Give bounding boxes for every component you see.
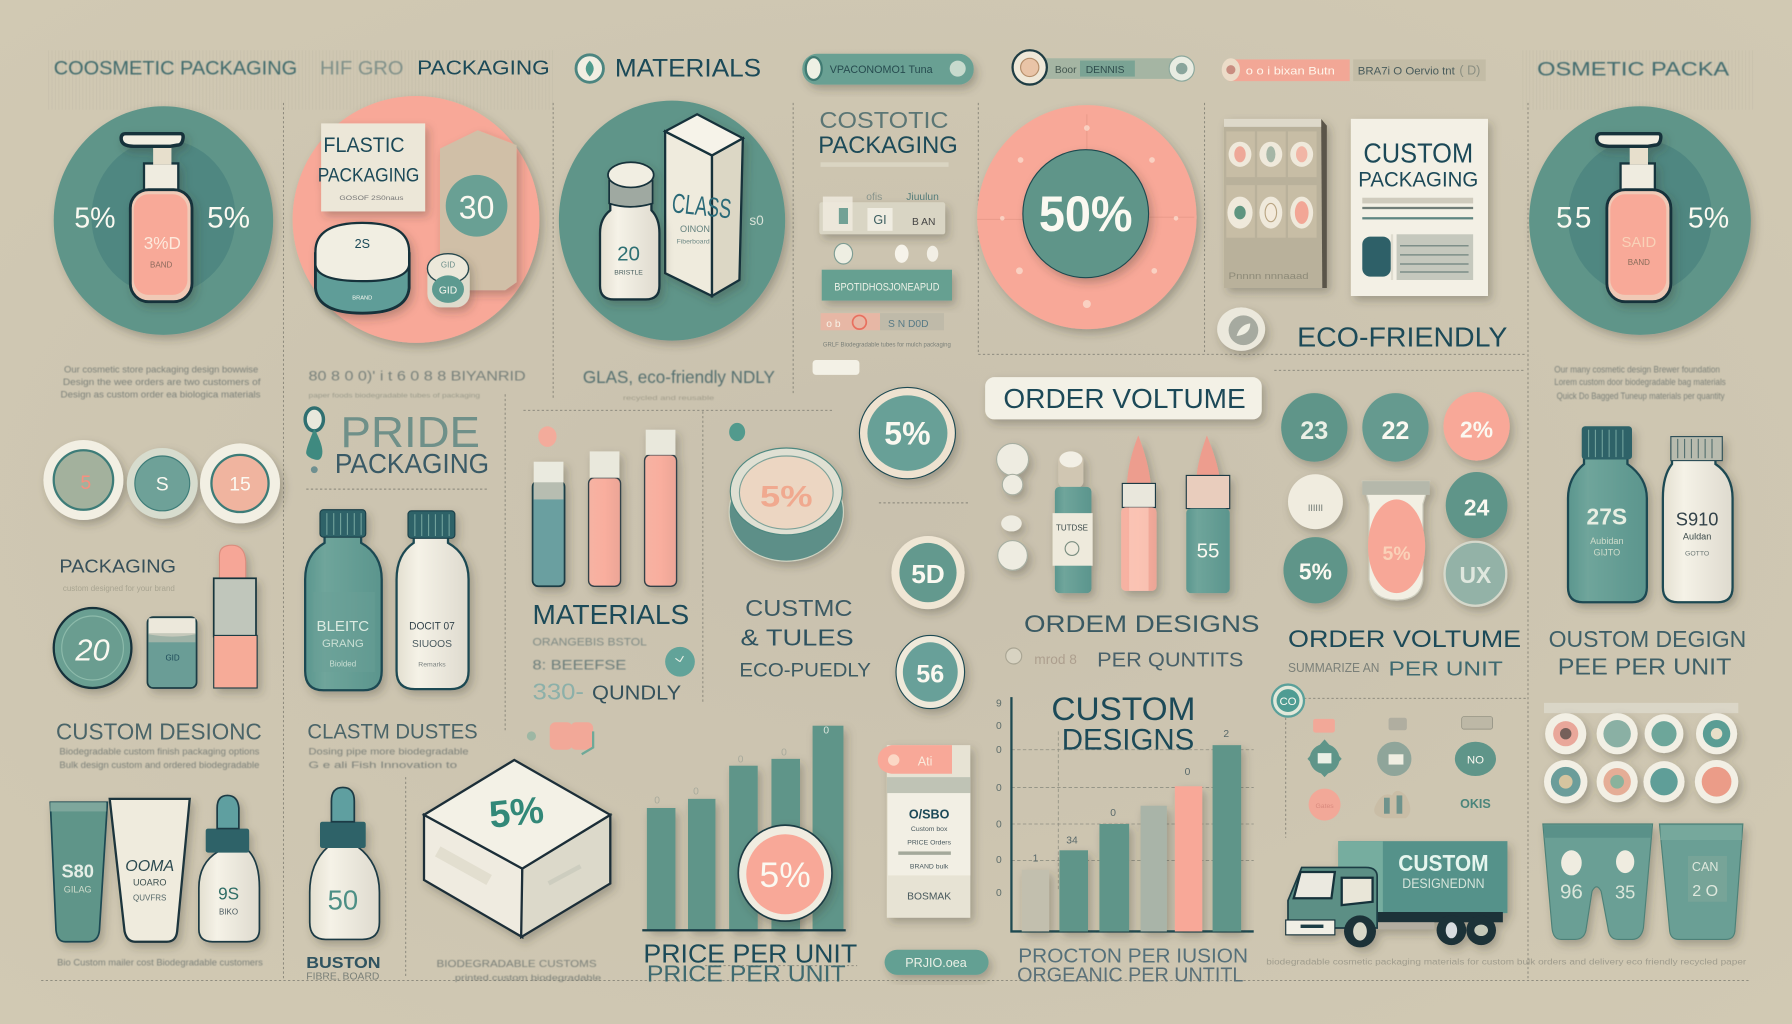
heading: costotic: COSTOTIC: [819, 107, 949, 133]
icon: teal tube: GILAG: [64, 885, 92, 895]
icon: cream tube: OOMA: [125, 858, 174, 875]
icon: large disc: 5%: [760, 480, 813, 513]
tag row: [821, 313, 944, 330]
icon: salmon dot: [538, 426, 557, 447]
icon: dropper bottle: 9S: [218, 883, 239, 903]
icon: white bottle: S910: [1676, 509, 1718, 530]
icon: white bottle: [397, 511, 469, 689]
header strip: [54, 50, 1729, 85]
icon: bottle: BRISTLE: [614, 269, 643, 276]
tube: teal with label: TUTDSE: [1056, 523, 1088, 532]
spec card: [819, 192, 945, 234]
axis labels: 0: [996, 855, 1002, 866]
icon: salmon tube: 5%: [1383, 543, 1411, 565]
icon: wide tube: CAN: [1692, 860, 1718, 874]
pill: ring label: Boor: [1055, 65, 1077, 76]
icon: pump bottle: [121, 134, 192, 302]
icon: delivery truck: [1286, 841, 1507, 947]
paper label: [318, 123, 425, 211]
label card: Custom box: [911, 826, 948, 833]
text: per quantities: mrod 8: [1034, 652, 1077, 667]
pill: salmon and tan label: BRA7i O Oervio tnt: [1358, 65, 1456, 77]
icon: box: OINON: [680, 224, 710, 234]
subtext: ORANGEBIS BSTOL: [533, 637, 647, 649]
heading: and rules: & TULES: [741, 625, 854, 651]
label card: PRICE Orders: [907, 840, 952, 847]
label card: BRAND bulk: [910, 864, 949, 871]
icon grid: NO: [1467, 754, 1484, 766]
teal button: BPOTIDHOSJONEAPUD: [834, 281, 939, 293]
badge: CO: [1279, 696, 1297, 708]
heading: cosmetic packaging: COOSMETIC PACKAGING: [54, 57, 297, 79]
bar value labels: 2: [1223, 729, 1229, 740]
salmon disc: [977, 105, 1197, 329]
pill: teal label: [802, 54, 974, 85]
axis labels: 0: [996, 745, 1002, 756]
panel: custom design bottles: [1549, 426, 1746, 679]
icon: teal bottle: GIJTO: [1594, 547, 1620, 557]
axis: [1011, 697, 1254, 931]
subtext: Biodegradable custom finish packaging options: [59, 746, 260, 756]
subtext: [533, 637, 647, 673]
paper label: GOSOF 2S0naus: [339, 195, 404, 202]
text: organic per unit: ORGEANIC PER UNTITL: [1017, 964, 1243, 987]
text: per quantities: PER QUNTITS: [1097, 648, 1243, 671]
axis labels: 0: [996, 721, 1002, 732]
pill: [885, 950, 989, 975]
label: custom: BUSTON: [306, 955, 381, 972]
heading: packaging: PACKAGING: [818, 132, 958, 159]
axis labels: [996, 698, 1002, 899]
icon: leaf badge: [576, 55, 603, 82]
badge: 23: [1281, 393, 1347, 462]
badge: pale: [1445, 542, 1506, 606]
icon: leaf seal: [1217, 307, 1265, 351]
teal badge: [1023, 150, 1149, 278]
icon: delivery truck: CUSTOM: [1398, 850, 1489, 876]
footer fine print: biodegradable cosmetic packaging materials for custom bulk orders and delivery eco friendly recycled paper: [1266, 958, 1747, 967]
small stat: s0: [749, 213, 764, 228]
icon: box: CLASS: [671, 187, 733, 224]
teal disc: [54, 106, 273, 335]
stat left: 55: [1556, 201, 1594, 234]
heading: custom design: OUSTOM DEGIGN: [1549, 626, 1746, 652]
axis labels: 0: [996, 819, 1002, 830]
caption: Lorem custom door biodegradable bag materials: [1554, 377, 1726, 387]
subtext: [309, 746, 469, 770]
badge values: [80, 472, 251, 495]
icon: dropper bottle: 50: [328, 885, 358, 916]
badge: 5%: 5%: [884, 416, 931, 452]
fine print: [437, 959, 602, 983]
panel: ring badges and lipstick: [43, 440, 280, 688]
fine print: BIODEGRADABLE CUSTOMS: [437, 959, 597, 970]
panel: custom design tubes: [50, 718, 263, 968]
subheading: price per unit: PRICE PER UNIT: [647, 961, 846, 987]
heading: packaging: PACKAGING: [335, 448, 489, 479]
panel: custom designs chart: [996, 691, 1254, 987]
badge values: 5: [80, 472, 91, 494]
icon: teal tube: [50, 802, 107, 942]
icon: white bottle: [1663, 437, 1733, 602]
icon: small jar: GID: [439, 286, 457, 297]
icon: teal tube: S80: [61, 861, 94, 882]
heading: materials: MATERIALS: [533, 599, 689, 630]
fine print: printed custom biodegradable: [455, 974, 602, 983]
bar value labels: [1033, 729, 1229, 865]
badge: 22: [1362, 393, 1429, 462]
badge values: S: [156, 473, 169, 495]
badge: 22: 22: [1381, 417, 1409, 445]
subtext: G e ali Fish Innovation to: [309, 760, 457, 770]
icon: bottle: 20: [617, 243, 640, 266]
icon grid: [1307, 717, 1496, 821]
badge: 20: [54, 608, 131, 688]
icon: white bottle: SIUOOS: [412, 639, 452, 650]
icon: tag: [527, 722, 593, 754]
text: per quantities: [1006, 648, 1243, 671]
badge: 24: 24: [1464, 494, 1490, 520]
bar value labels: 0: [823, 726, 829, 737]
stat left: 5%: [74, 202, 116, 234]
caption: [309, 369, 526, 400]
swatch binder: [1224, 119, 1327, 288]
teal disc: [1529, 106, 1751, 335]
icon: twin tube: 96: [1560, 880, 1583, 903]
tag: [878, 745, 952, 774]
pill: ring label: DENNIS: [1086, 65, 1125, 76]
panel: pump bottle circle right: [1529, 106, 1751, 401]
panel: plastic packaging circle: [293, 96, 539, 400]
icon: cream tube: UOARO: [133, 878, 166, 888]
icon: white bottle: Remarks: [418, 661, 446, 668]
icon: teal bottle: 27S: [1587, 504, 1627, 530]
heading: pride: PRIDE: [341, 409, 480, 457]
stat: 330 quantity: QUNDLY: [592, 681, 681, 704]
tube: tall salmon: [645, 430, 677, 586]
heading: packaging: PACKAGING: [417, 56, 550, 79]
icon: white bottle: GOTTO: [1685, 550, 1709, 557]
bars: [1022, 745, 1241, 931]
icon: white bottle: Auldan: [1683, 531, 1711, 541]
fine print: custom designed for your brand: [63, 584, 175, 593]
chip: order volume: [985, 377, 1262, 419]
badge values: 15: [229, 473, 251, 495]
badge: 2%: 2%: [1460, 417, 1493, 443]
badge: 2%: [1443, 392, 1510, 461]
panel: discs and custom rules: [729, 387, 965, 709]
caption: [1554, 365, 1726, 401]
badge: [1272, 685, 1304, 717]
badge: cream: IIIIII: [1308, 503, 1323, 513]
icon: small jar: GID: [165, 654, 180, 663]
white chip: [813, 360, 859, 375]
icon: cube: [424, 760, 610, 937]
icon grid: OKIS: [1460, 797, 1491, 811]
panel: order volume: [985, 377, 1262, 671]
icon: twin tube: 35: [1615, 881, 1635, 902]
text: per unit: PEE PER UNIT: [1558, 653, 1731, 679]
stat 50%: 50%: [1039, 185, 1133, 242]
subtext: Dosing pipe more biodegradable: [309, 746, 469, 756]
text: eco: ECO-PUEDLY: [739, 660, 871, 682]
icon: cream tube: QUVFRS: [133, 894, 166, 903]
spec card: GI: [873, 213, 887, 227]
icon: white bottle: DOCIT 07: [409, 621, 455, 633]
icon: box: [665, 114, 743, 296]
pill: salmon and tan label: o o i bixan Butn: [1246, 65, 1335, 77]
text: production per: PROCTON PER IUSION: [1018, 944, 1248, 967]
teal button: [822, 270, 952, 301]
icon: teal bottle: Aubidan: [1590, 536, 1624, 546]
caption: Our cosmetic store packaging design bowwise: [64, 365, 258, 375]
heading: custom: CUSTOM: [1051, 691, 1195, 727]
badge: cream: [1288, 474, 1343, 529]
heading: materials: MATERIALS: [615, 55, 761, 83]
icon: dropper bottle: [310, 787, 379, 939]
panel: materials tubes: [533, 426, 695, 704]
heading: packaging: PACKAGING: [59, 556, 176, 577]
caption: 80 8 0 0)' i t 6 0 8 8 BIYANRID: [309, 369, 526, 384]
panel: price card: [878, 745, 989, 975]
heading: order volume: ORDER VOLTUME: [1288, 626, 1521, 653]
caption: paper foods biodegradable tubes of packaging: [309, 393, 480, 400]
icon: wide tube: 2 O: [1692, 883, 1718, 900]
lipstick: salmon: [1121, 435, 1157, 591]
caption: [61, 365, 261, 400]
lipstick: teal: 55: [1197, 540, 1219, 563]
ring badges: [43, 440, 280, 523]
pill: teal label: VPACONOMO1 Tuna: [830, 64, 933, 76]
grid: [1011, 731, 1254, 891]
icon: bottle: [600, 162, 659, 299]
icon: teal bottle: BLEITC: [317, 619, 369, 635]
chip: order volume: ORDER VOLTUME: [1003, 383, 1246, 414]
tag row: o b: [826, 319, 841, 330]
small icons: [997, 443, 1029, 570]
bottle label: [1622, 235, 1656, 267]
label: custom: [306, 955, 381, 982]
bottle label: BAND: [1628, 258, 1650, 267]
text: per unit: PER UNIT: [1389, 657, 1503, 680]
icon: small jar: [147, 617, 197, 688]
salmon disc: [293, 96, 539, 343]
panel: 50% circle: [977, 105, 1197, 329]
icon: large disc: [729, 448, 843, 561]
heading: order designs: ORDEM DESIGNS: [1024, 611, 1259, 638]
caption: [583, 367, 775, 402]
panel: pride packaging: [305, 408, 489, 690]
icon: cube: 5%: [487, 788, 546, 836]
caption: GLAS, eco-friendly NDLY: [583, 367, 775, 387]
stat right: 5%: [207, 201, 250, 234]
icon: dropper bottle: [199, 795, 259, 942]
subtext: Bulk design custom and ordered biodegradable: [59, 760, 259, 770]
icon: cream tube: [110, 799, 190, 942]
badge: 24: [1446, 472, 1507, 538]
badge: 5D: [891, 536, 965, 609]
heading: gro: HIF GRO: [320, 57, 403, 79]
icon: pump bottle: [1597, 134, 1671, 302]
tag: Ati: [918, 755, 932, 769]
bottle label: SAID: [1622, 235, 1656, 251]
swatch binder: Pnnnn nnnaaad: [1229, 271, 1309, 281]
panel: round swatches and tubes: [1543, 703, 1743, 939]
badge: 5%: 5%: [760, 855, 811, 895]
icon: teal dot: [729, 423, 745, 441]
panel: glass circle: [559, 101, 785, 402]
icon: teal bottle: [305, 510, 382, 690]
icon: jar: 2S: [355, 237, 370, 251]
badge: 5%: 5%: [1299, 558, 1332, 584]
pill: salmon and tan label: [1222, 58, 1486, 81]
spec card: Jiuulun: [906, 192, 939, 203]
badge: 20: 20: [74, 633, 110, 668]
tube: teal: [533, 462, 565, 586]
bar value labels: 34: [1066, 835, 1078, 846]
heading: cosmetic packa: OSMETIC PACKA: [1537, 58, 1729, 80]
pill: ring label: [1013, 50, 1194, 85]
panel: price per unit chart: [642, 726, 857, 987]
axis labels: 0: [996, 888, 1002, 899]
icon: small jar: GID: [441, 260, 455, 269]
text: per unit: SUMMARIZE AN: [1288, 661, 1379, 675]
caption: Our many cosmetic design Brewer foundation: [1554, 365, 1720, 375]
icon: twin tube: [1543, 824, 1653, 939]
box with 30 badge: 30: [459, 189, 494, 225]
badge: 5D: 5D: [911, 559, 945, 589]
bar value labels: [654, 726, 829, 806]
icon: delivery truck: DESIGNEDNN: [1402, 876, 1485, 891]
paper label: PACKAGING: [318, 165, 419, 187]
panel: icon grid and truck: [1272, 685, 1507, 947]
icon grid: Gates: [1315, 803, 1334, 810]
bottle label: [144, 233, 181, 269]
icon: wide tube: [1659, 824, 1743, 939]
heading: custom dustes: CLASTM DUSTES: [307, 718, 478, 743]
heading: designs: DESIGNS: [1062, 724, 1194, 757]
icon: lipstick: [214, 545, 257, 688]
fine print: Bio Custom mailer cost Biodegradable customers: [57, 958, 263, 968]
spec card: B AN: [912, 217, 935, 228]
tube: teal with label: [1053, 451, 1093, 593]
bar value labels: 0: [693, 786, 699, 797]
axis labels: 9: [996, 698, 1002, 709]
text: per unit: [1288, 657, 1503, 680]
dots row: [834, 243, 938, 264]
icon: salmon tube: [1362, 481, 1430, 600]
badge: 23: 23: [1300, 417, 1328, 445]
icon: teal bottle: [1568, 426, 1647, 602]
stat: 330 quantity: 330-: [533, 678, 584, 704]
subtext: [59, 746, 260, 770]
panel: dropper and cube: [306, 718, 610, 983]
label: custom: FIBRE, BOARD: [306, 971, 379, 982]
lipstick: teal: [1186, 435, 1230, 593]
caption: Design the wee orders are two customers of: [63, 377, 261, 387]
panel: cosmetic packaging list: [813, 107, 958, 375]
label card: BOSMAK: [907, 891, 951, 902]
label card: O/SBO: [909, 807, 950, 821]
badge: 5%: [859, 387, 955, 479]
bar value labels: 0: [781, 747, 787, 758]
tube: salmon: [589, 451, 621, 586]
badge: 5%: [1283, 537, 1347, 603]
badge: 5B: 56: [916, 660, 944, 688]
spec card: ofis: [866, 192, 882, 203]
panel: value badges: [1281, 392, 1521, 680]
label card: [887, 745, 970, 918]
paper label: FLASTIC: [323, 132, 405, 157]
pill: PRJIO.oea: [905, 956, 967, 970]
subtext: 8: BEEEFSE: [533, 658, 626, 673]
badge: 5B: [896, 635, 965, 709]
icon: drop marker: [305, 408, 323, 473]
heading: custom design: CUSTOM DESIONC: [56, 718, 262, 744]
panel: custom packaging: [1217, 119, 1507, 352]
heading: custmc: CUSTMC: [745, 595, 853, 621]
bar value labels: 0: [738, 754, 744, 765]
paper: custom packaging: [1351, 119, 1488, 296]
icon: small jar: [427, 254, 470, 307]
heading: eco-friendly: ECO-FRIENDLY: [1297, 321, 1507, 352]
badge: 5%: [738, 825, 832, 921]
bar value labels: 0: [1185, 767, 1191, 778]
icon: box: Fiberboard: [677, 238, 710, 245]
bottle label: BAND: [150, 260, 172, 269]
axis labels: 0: [996, 783, 1002, 794]
caption: Quick Do Bagged Tuneup materials per quantity: [1557, 391, 1725, 401]
panel: pump bottle circle left: [54, 106, 273, 400]
icon: jar: BRAND: [352, 295, 372, 301]
stat right: 5%: [1688, 202, 1729, 234]
paper: custom packaging: CUSTOM: [1363, 137, 1473, 168]
icon: clock: [665, 647, 695, 677]
caption: recycled and reusable: [623, 395, 715, 402]
stat: 330 quantity: [533, 678, 681, 704]
bottle label: 3%D: [144, 233, 181, 253]
icon: teal bottle: GRANG: [322, 638, 364, 650]
caption: Design as custom order ea biologica materials: [61, 390, 261, 400]
pill: salmon and tan label: ( D): [1459, 63, 1480, 77]
icon: teal bottle: Biolded: [330, 659, 356, 668]
paper: custom packaging: PACKAGING: [1358, 166, 1478, 191]
tag row: S N D0D: [888, 319, 929, 330]
bar chart: [647, 726, 843, 930]
bar value labels: 0: [1110, 808, 1116, 819]
teal disc: [559, 101, 785, 341]
bar value labels: 1: [1033, 854, 1039, 865]
badge: pale: UX: [1460, 562, 1492, 588]
icon: jar: [315, 223, 409, 313]
small markers: [1000, 125, 1178, 308]
heading: price per unit: PRICE PER UNIT: [643, 938, 857, 968]
round swatches: [1544, 713, 1738, 803]
fine print: GRLF Biodegradable tubes for mulch packaging: [823, 341, 951, 348]
icon: dropper bottle: BIKO: [219, 907, 238, 916]
bar value labels: 0: [654, 795, 660, 806]
box with 30 badge: [440, 130, 517, 290]
